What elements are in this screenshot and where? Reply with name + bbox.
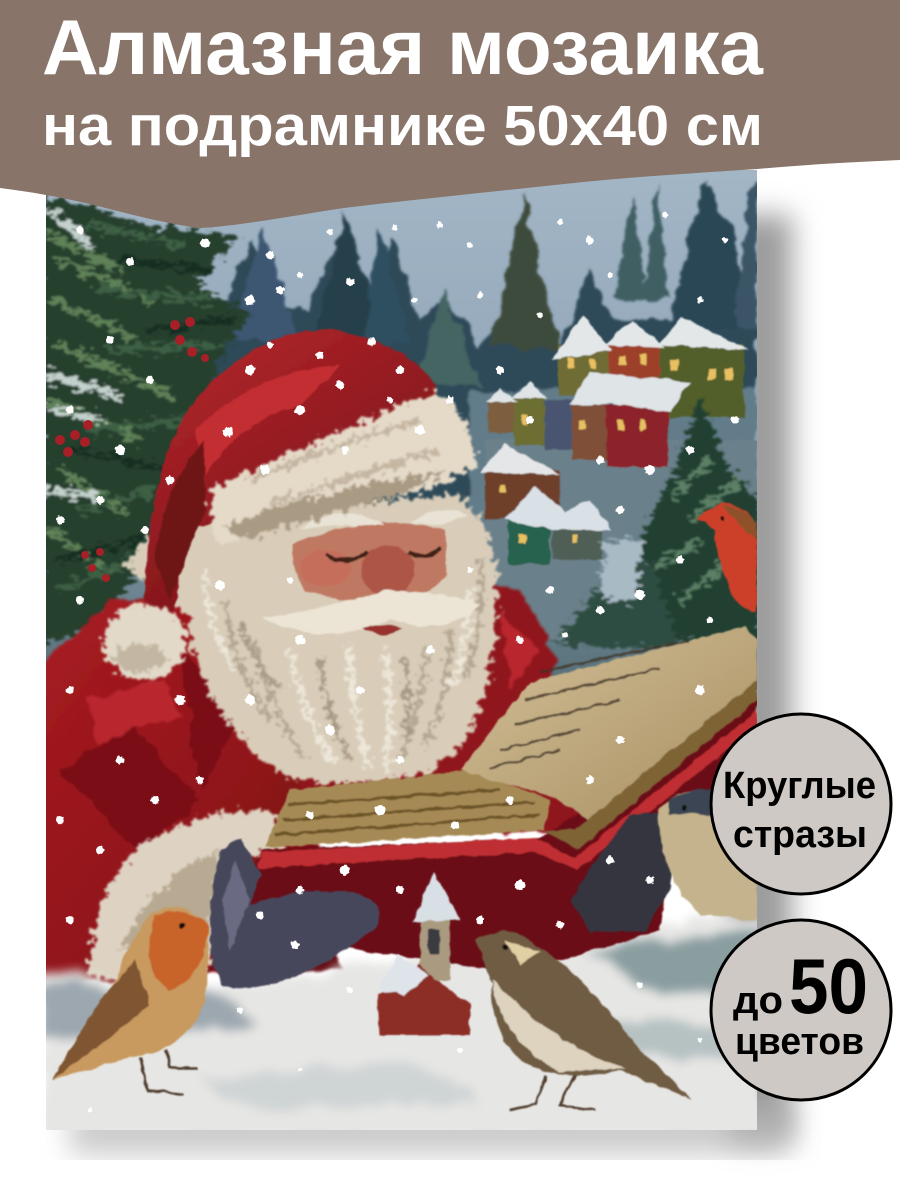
badge: up to 50 colours bbox=[711, 920, 891, 1100]
holly berries bbox=[55, 317, 209, 582]
distant forest bbox=[48, 180, 757, 544]
fur cuff bbox=[88, 811, 285, 984]
Santa coat bbox=[40, 585, 610, 985]
left glove bbox=[210, 838, 380, 989]
left fir tree bbox=[40, 195, 250, 645]
santa face bbox=[262, 510, 480, 635]
badge: round rhinestones: стразы bbox=[733, 814, 867, 856]
title: Алмазная мозаика bbox=[42, 3, 764, 91]
sky bbox=[46, 170, 757, 690]
left robin bbox=[52, 907, 209, 1094]
hat fur brim bbox=[210, 392, 476, 545]
beige bird at right edge bbox=[658, 789, 757, 920]
top banner bbox=[0, 0, 900, 228]
badge: up to 50 colours: цветов bbox=[735, 1021, 864, 1063]
canvas drop shadow bbox=[70, 215, 792, 1155]
badge: round rhinestones: Круглые bbox=[723, 765, 876, 807]
miniature church bbox=[378, 872, 470, 1035]
badge: round rhinestones bbox=[711, 714, 891, 894]
open book pages bbox=[265, 626, 757, 850]
right glove bbox=[570, 812, 672, 932]
painting: Santa reading a book bbox=[40, 170, 765, 1140]
right fir tree bbox=[555, 395, 760, 650]
red book cover bbox=[244, 698, 757, 968]
village of snowy houses bbox=[480, 315, 757, 640]
snowy ground bbox=[40, 915, 765, 1140]
santa beard bbox=[125, 495, 498, 784]
santa hat bbox=[145, 330, 445, 610]
badge: up to 50 colours: 50 bbox=[789, 942, 868, 1030]
hat pom-pom bbox=[103, 604, 187, 680]
subtitle: на подрамнике 50х40 см bbox=[42, 94, 763, 158]
falling snow bbox=[56, 212, 739, 1112]
badge: up to 50 colours: до bbox=[733, 980, 783, 1022]
centre brown bird bbox=[476, 931, 692, 1110]
red robin on branch bbox=[697, 503, 757, 612]
